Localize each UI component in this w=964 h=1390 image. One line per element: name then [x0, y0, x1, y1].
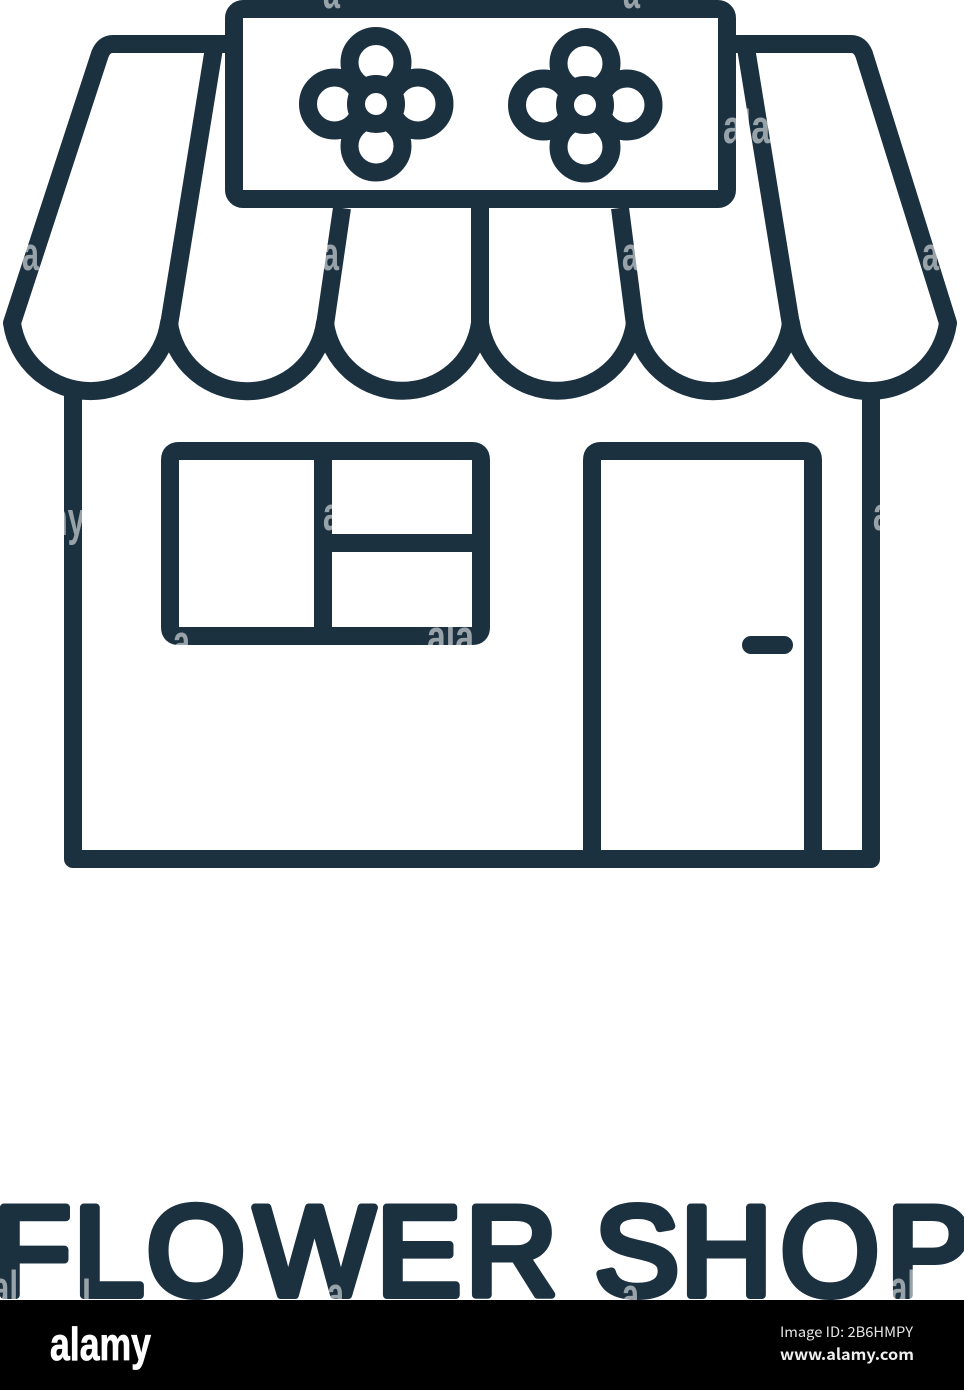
website url: www.alamy.com: [780, 1343, 914, 1365]
shop walls: [73, 395, 871, 859]
sign board: [234, 9, 727, 199]
watermark: a: [922, 227, 940, 280]
watermark: a: [22, 227, 40, 280]
watermark: a: [873, 487, 891, 540]
window: [170, 451, 481, 636]
watermark: a: [622, 1268, 640, 1321]
watermark: al: [890, 1261, 916, 1314]
icon: right flower: [517, 37, 654, 174]
title: FLOWER SHOP: [0, 1180, 964, 1322]
watermark: a: [327, 1267, 345, 1320]
watermark: a: [622, 227, 640, 280]
image id: Image ID: 2B6HMPY: [780, 1322, 914, 1342]
watermark: my: [40, 492, 85, 545]
footer bar: [0, 1300, 964, 1390]
icon: left flower: [308, 36, 444, 172]
alamy logo: alamy: [50, 1318, 151, 1370]
watermark: a: [173, 615, 191, 668]
awning: [12, 44, 948, 391]
watermark: ala: [427, 610, 475, 663]
watermark: a: [323, 487, 341, 540]
watermark: l: [82, 1270, 91, 1323]
icon: flower shop: [12, 9, 948, 859]
door handle: [751, 636, 784, 654]
watermark: ala: [723, 100, 771, 153]
watermark: a: [322, 227, 340, 280]
door: [592, 451, 813, 859]
